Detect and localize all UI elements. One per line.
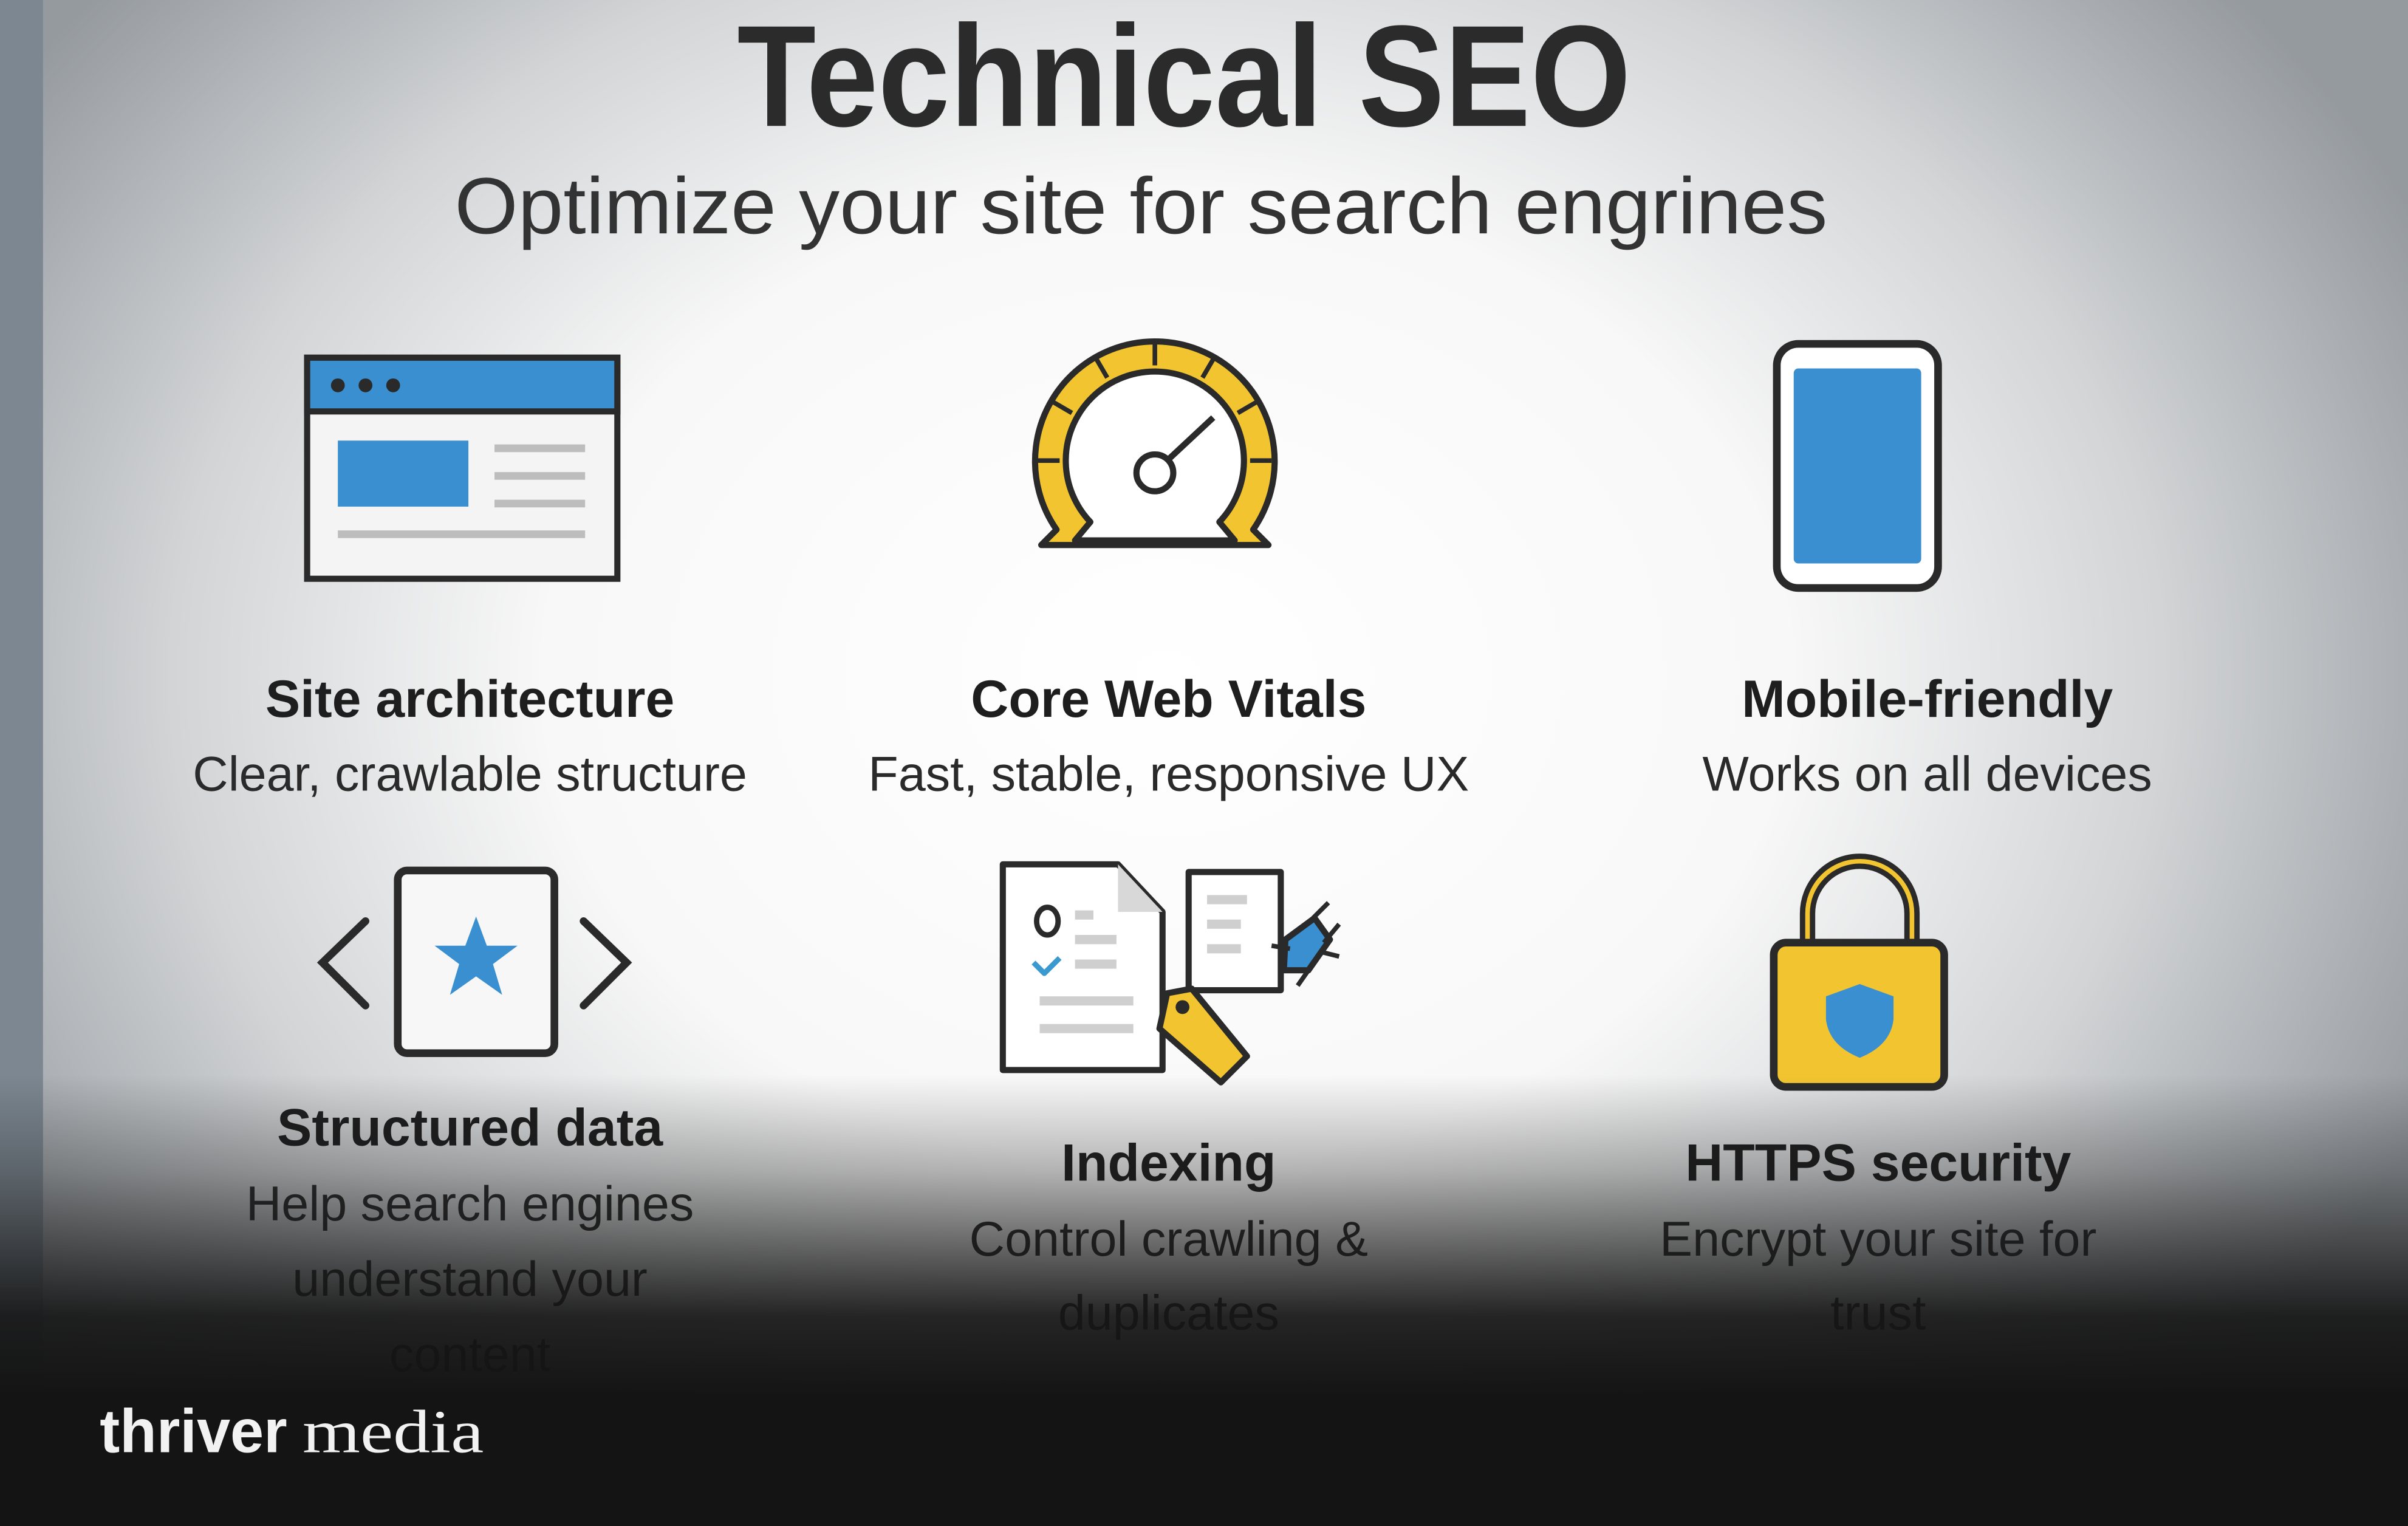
logo: media (303, 1398, 484, 1466)
icon: structured data (323, 871, 626, 1053)
label: indexing: duplicates (1058, 1286, 1279, 1341)
label: https security (1660, 1134, 2096, 1341)
label: structured data: Help search engines (246, 1177, 694, 1231)
label: core web vitals: Core Web Vitals (971, 670, 1366, 728)
label: structured data (246, 1098, 694, 1382)
labels: bottom row (246, 1098, 2096, 1382)
label: mobile-friendly: Mobile-friendly (1742, 670, 2113, 728)
label: mobile-friendly (1703, 670, 2152, 801)
label: structured data: Structured data (277, 1098, 663, 1157)
label: https security: Encrypt your site for (1660, 1212, 2096, 1267)
label: core web vitals: Fast, stable, responsive UX (868, 747, 1469, 801)
logo: thriver (100, 1397, 287, 1466)
icon: lock (1774, 861, 1945, 1087)
label: site architecture: Clear, crawlable structure (193, 747, 747, 801)
title: Technical SEO (737, 0, 1631, 157)
label: https security: trust (1830, 1286, 1926, 1341)
icon: mobile (1777, 344, 1938, 588)
label: structured data: content (389, 1327, 550, 1382)
icon: gauge (1035, 341, 1274, 545)
label: mobile-friendly: Works on all devices (1703, 747, 2152, 801)
label: structured data: understand your (292, 1252, 648, 1307)
icon: indexing (1003, 864, 1339, 1083)
label: indexing (970, 1134, 1368, 1341)
label: indexing: Control crawling & (970, 1212, 1368, 1267)
icon: browser (307, 358, 617, 579)
label: site architecture: Site architecture (265, 670, 674, 728)
label: core web vitals (868, 670, 1469, 801)
label: site architecture (193, 670, 747, 801)
label: indexing: Indexing (1061, 1134, 1276, 1192)
subtitle: Optimize your site for search engrines (454, 161, 1827, 250)
label: https security: HTTPS security (1685, 1134, 2071, 1192)
logo (100, 1397, 484, 1466)
labels: top row (193, 670, 2152, 801)
